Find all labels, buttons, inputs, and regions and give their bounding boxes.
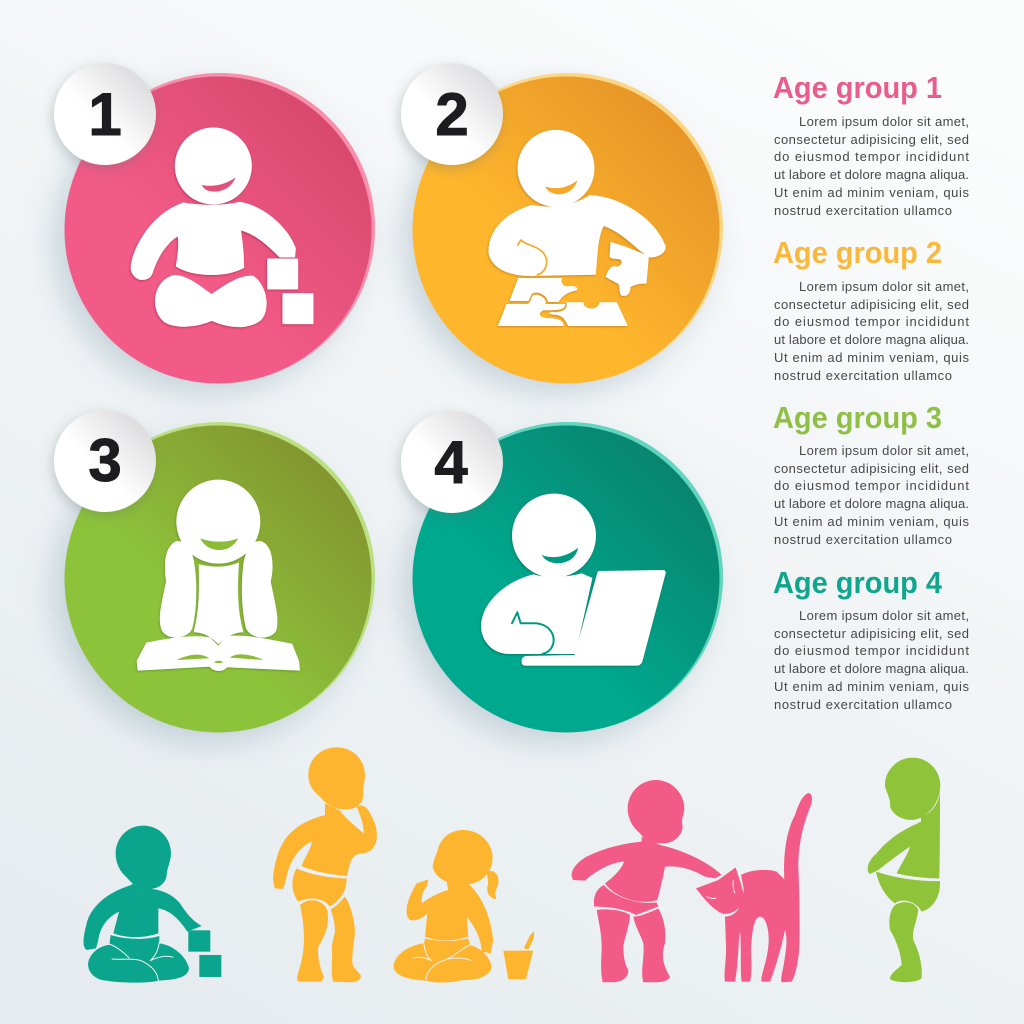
text block: age group 3 xyxy=(774,443,970,547)
badge: number 1: 1 xyxy=(88,81,122,148)
heading: age group 4: Age group 4 xyxy=(773,565,943,600)
text block: age group 2: nostrud exercitation ullamco xyxy=(774,368,952,383)
badge: number 3 xyxy=(54,410,156,512)
panel: age group 1 circle xyxy=(55,73,375,393)
icon: pink baby petting cat xyxy=(572,780,812,982)
text block: age group 3: Lorem ipsum dolor sit amet, xyxy=(799,443,969,458)
text block: age group 3: consectetur adipisicing elit, sed xyxy=(774,461,969,476)
heading: age group 2: Age group 2 xyxy=(773,235,942,270)
badge: number 4 xyxy=(401,411,503,513)
badge: number 3: 3 xyxy=(88,427,122,494)
text block: age group 1: nostrud exercitation ullamco xyxy=(774,203,952,218)
badge: number 2 xyxy=(401,63,503,165)
text block: age group 4: do eiusmod tempor incididunt xyxy=(774,643,969,658)
text block: age group 4 xyxy=(774,608,970,712)
text block: age group 1: Ut enim ad minim veniam, quis xyxy=(774,185,970,200)
text block: age group 1: do eiusmod tempor incididunt xyxy=(774,149,969,164)
icon: orange sitting girl with cup xyxy=(393,830,534,983)
icon: child reading book xyxy=(137,480,299,670)
icon: baby with blocks xyxy=(132,128,313,326)
text block: age group 2 xyxy=(774,279,970,383)
text block: age group 4: Lorem ipsum dolor sit amet, xyxy=(799,608,969,623)
text block: age group 2: Lorem ipsum dolor sit amet, xyxy=(799,279,969,294)
text block: age group 3: nostrud exercitation ullamco xyxy=(774,532,952,547)
text block: age group 4: Ut enim ad minim veniam, quis xyxy=(774,679,970,694)
panel: age group 4 circle xyxy=(403,422,723,742)
text block: age group 3: ut labore et dolore magna aliqua. xyxy=(774,496,969,511)
text block: age group 1: ut labore et dolore magna aliqua. xyxy=(774,167,969,182)
panel: age group 2 circle xyxy=(403,73,723,393)
text block: age group 1: Lorem ipsum dolor sit amet, xyxy=(799,114,969,129)
text block: age group 3: Ut enim ad minim veniam, quis xyxy=(774,514,970,529)
text block: age group 2: consectetur adipisicing elit, sed xyxy=(774,297,969,312)
badge: number 2: 2 xyxy=(435,81,469,148)
text block: age group 2: do eiusmod tempor incididunt xyxy=(774,314,969,329)
icon: orange standing baby xyxy=(273,747,377,982)
icon: green standing baby xyxy=(868,758,940,982)
heading: age group 1: Age group 1 xyxy=(773,70,942,105)
icon: teal sitting baby with blocks xyxy=(84,826,221,983)
text block: age group 1: consectetur adipisicing elit, sed xyxy=(774,132,969,147)
text block: age group 3: do eiusmod tempor incididunt xyxy=(774,478,969,493)
text block: age group 4: nostrud exercitation ullamco xyxy=(774,697,952,712)
panel: age group 3 circle xyxy=(55,422,375,742)
heading: age group 3: Age group 3 xyxy=(773,400,942,435)
text block: age group 4: ut labore et dolore magna aliqua. xyxy=(774,661,969,676)
text block: age group 1 xyxy=(774,114,970,218)
icon: person with laptop xyxy=(482,494,665,665)
icon: cat xyxy=(696,793,812,982)
text block: age group 2: ut labore et dolore magna aliqua. xyxy=(774,332,969,347)
icon: child with puzzle xyxy=(489,131,665,326)
text block: age group 4: consectetur adipisicing elit, sed xyxy=(774,626,969,641)
badge: number 1 xyxy=(54,63,156,165)
text block: age group 2: Ut enim ad minim veniam, quis xyxy=(774,350,970,365)
badge: number 4: 4 xyxy=(434,429,468,496)
